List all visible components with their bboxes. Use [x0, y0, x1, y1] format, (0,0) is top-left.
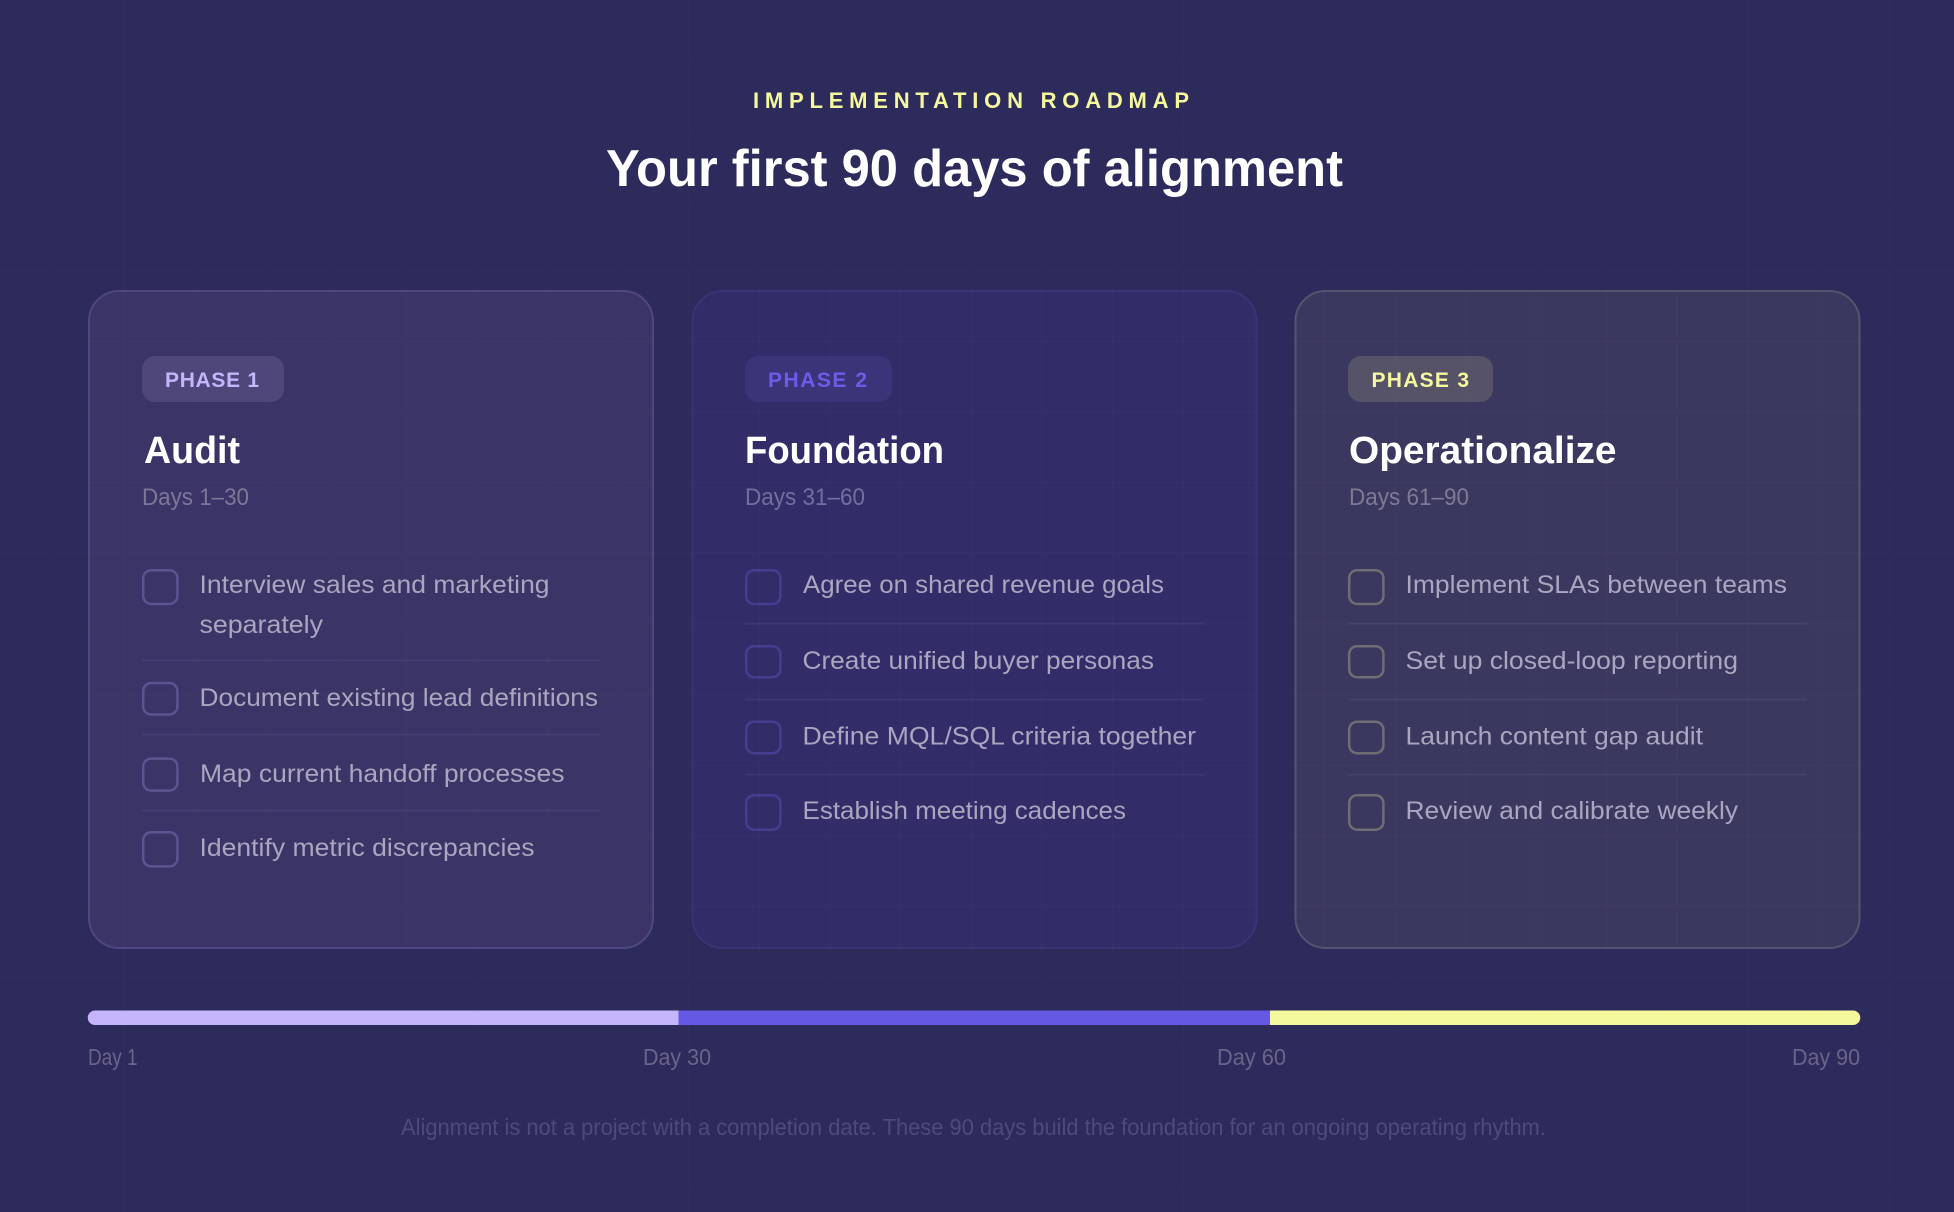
checklist item: Launch content gap audit [1406, 722, 1703, 750]
phase 3 badge: PHASE 3 [1372, 369, 1469, 392]
timeline labels: Day 30 [643, 1044, 711, 1070]
checklist item: separately [200, 611, 324, 639]
checklist item: Document existing lead definitions [200, 684, 598, 712]
checklist item: Map current handoff processes [200, 760, 564, 788]
phase 2 heading: Foundation [745, 430, 944, 472]
checklist item [143, 570, 549, 639]
phase 1 heading: Audit [144, 430, 240, 472]
checklist item: Establish meeting cadences [802, 797, 1126, 825]
checklist item: Agree on shared revenue goals [803, 571, 1164, 599]
checklist item [746, 795, 1126, 830]
timeline labels: Day 90 [1792, 1044, 1860, 1070]
checklist item: Implement SLAs between teams [1406, 571, 1787, 599]
phase 1 dates: Days 1–30 [142, 484, 249, 511]
checklist item: Define MQL/SQL criteria together [802, 722, 1196, 750]
footer note: Alignment is not a project with a completion date. These 90 days build the foundation for an ongoing operating rhythm. [401, 1114, 1546, 1140]
phase 3 dates: Days 61–90 [1349, 484, 1469, 511]
checklist item: Create unified buyer personas [802, 647, 1154, 675]
checklist item [746, 570, 1164, 604]
checklist item [143, 832, 534, 866]
phase 2 badge [745, 356, 892, 402]
header [606, 88, 1343, 198]
panel: phase 3 operationalize [1296, 291, 1860, 948]
checklist item: Review and calibrate weekly [1406, 797, 1739, 825]
title: Your first 90 days of alignment [606, 140, 1343, 198]
timeline labels: Day 1 [88, 1044, 138, 1070]
checklist item [1349, 570, 1787, 604]
checklist item: Set up closed-loop reporting [1406, 647, 1738, 675]
phase 2 dates: Days 31–60 [745, 484, 865, 511]
checklist item: Interview sales and marketing [200, 571, 550, 599]
phase 3 badge [1348, 356, 1493, 402]
eyebrow label: IMPLEMENTATION ROADMAP [753, 88, 1189, 113]
timeline bar [88, 1010, 1860, 1025]
timeline labels [88, 1044, 1860, 1070]
checklist item [1349, 795, 1739, 830]
panel: phase 1 audit [89, 291, 653, 948]
checklist item: Identify metric discrepancies [200, 834, 534, 862]
phase 3 heading: Operationalize [1349, 430, 1616, 472]
phase 1 badge [142, 356, 284, 402]
phase 2 badge: PHASE 2 [768, 369, 867, 392]
phase 1 badge: PHASE 1 [165, 369, 259, 392]
panel: phase 2 foundation [692, 291, 1256, 948]
timeline labels: Day 60 [1217, 1044, 1286, 1070]
